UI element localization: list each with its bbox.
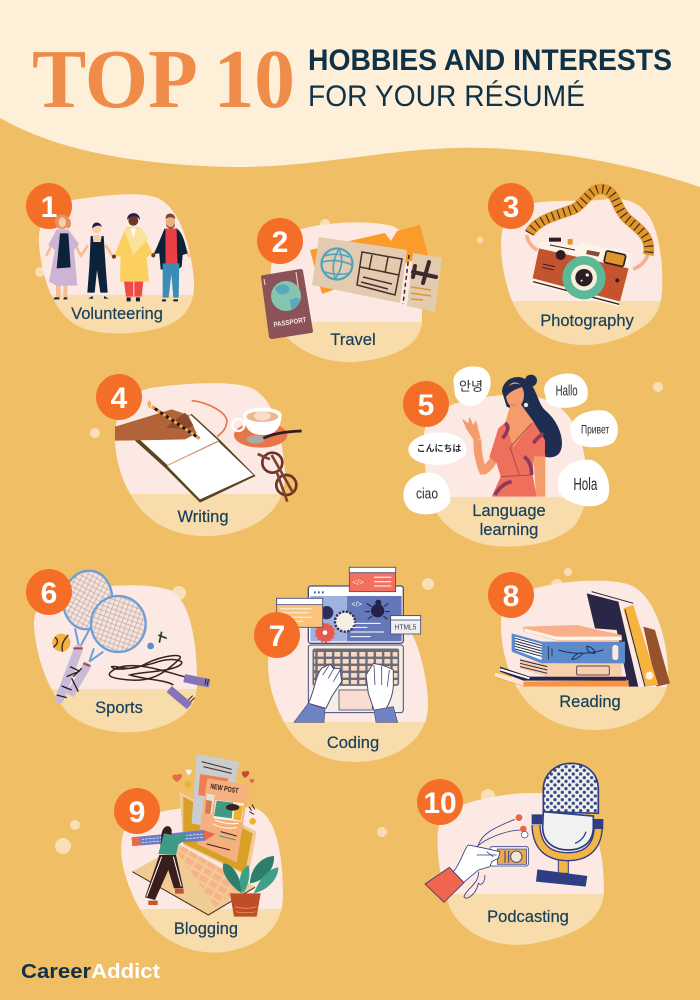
number badge 3: 3 [503, 191, 519, 224]
label: Language [472, 502, 546, 520]
number badge 6: 6 [41, 577, 57, 610]
icon: rackets, ball, shuttlecock, rope [52, 568, 210, 709]
icon: laptop with code windows: HTML5 [395, 624, 416, 631]
bubble: Hallo: Hallo [556, 383, 578, 399]
label: Blogging [174, 920, 238, 938]
number badge 1 [26, 183, 72, 229]
icon: woman [403, 366, 618, 514]
blob background [424, 395, 586, 546]
number badge 2: 2 [272, 226, 288, 259]
icon: laptop with code windows: </> [351, 600, 362, 609]
blob background [121, 807, 283, 953]
decorative dots [35, 219, 663, 854]
blob background [501, 198, 662, 345]
number badge 4: 4 [111, 382, 128, 415]
icon: four people holding hands [47, 213, 189, 301]
label: Podcasting [487, 908, 569, 926]
number badge 9 [114, 788, 160, 834]
blob background [38, 194, 194, 334]
blob background [270, 222, 422, 362]
label: Coding [327, 734, 379, 752]
number badge 10 [417, 779, 463, 825]
bubble: こんにちは: こんにちは [417, 444, 461, 454]
label: Writing [177, 508, 229, 526]
label: Sports [95, 699, 143, 717]
logo: CareerAddict: Career Addict [21, 961, 160, 983]
label: Photography [540, 312, 635, 330]
panel: 4 Writing [96, 374, 302, 544]
number badge 3 [488, 183, 534, 229]
title [32, 33, 672, 126]
icon: microphone [425, 763, 603, 902]
icon: writing notebook and coffee [115, 400, 302, 503]
title: hobbies and interests: HOBBIES AND INTERESTS [308, 44, 672, 77]
bubble: Привет [570, 410, 618, 447]
icon: laptop with code windows [277, 567, 421, 722]
number badge 8 [488, 572, 534, 618]
title: TOP 10: TOP 10 [32, 33, 295, 126]
label [472, 502, 546, 539]
bubble: Hola: Hola [573, 474, 597, 494]
number badge 8: 8 [503, 580, 519, 613]
icon: blogger on laptop with plant [132, 754, 278, 917]
panel: 8 Reading [488, 572, 675, 737]
number badge 4 [96, 374, 142, 420]
icon: laptop with code windows: </> [352, 578, 364, 587]
bubble: 안녕 [453, 366, 491, 406]
panel: 1 Volunteering [26, 183, 200, 340]
blob background [438, 793, 604, 945]
bubble: 안녕: 안녕 [459, 380, 483, 394]
number badge 1: 1 [41, 191, 57, 224]
panel: 7 Coding [254, 567, 432, 767]
number badge 5: 5 [418, 389, 434, 422]
blob background [500, 580, 668, 730]
number badge 7 [254, 612, 300, 658]
label: Volunteering [71, 305, 163, 323]
number badge 5 [403, 381, 449, 427]
bubble: Hallo [544, 374, 588, 408]
label: Reading [559, 693, 621, 711]
panel: 9 Blogging [114, 754, 290, 959]
bubble: Hola [558, 460, 609, 506]
icon: blogger on laptop with plant: NEW POST [210, 781, 239, 795]
blob background [115, 383, 286, 536]
title: for your résumé: FOR YOUR RÉSUMÉ [308, 80, 585, 113]
header wave [0, 0, 700, 187]
icon: camera [527, 189, 649, 307]
label: Travel [330, 331, 376, 349]
icon: stack of books [495, 592, 670, 687]
blob background [34, 585, 197, 732]
panel: 10 Podcasting [417, 763, 610, 949]
number badge 10: 10 [423, 787, 457, 820]
number badge 7: 7 [269, 620, 285, 653]
number badge 9: 9 [129, 796, 145, 829]
number badge 2 [257, 218, 303, 264]
bubble: ciao: ciao [416, 487, 438, 503]
number badge 6 [26, 569, 72, 615]
bubble: ciao [403, 472, 450, 514]
icon: tickets [310, 225, 442, 312]
label: learning [480, 521, 538, 539]
panel: 5 Language learning [403, 366, 618, 552]
icon: passport [261, 269, 313, 339]
panel: 3 Photography [488, 183, 670, 349]
panel: 2 Travel [257, 215, 442, 367]
bubble: こんにちは [408, 433, 466, 465]
icon: passport: PASSPORT [273, 317, 308, 329]
panel: 6 Sports [26, 568, 210, 739]
bubble: Привет: Привет [581, 422, 610, 436]
blob background [268, 628, 428, 762]
